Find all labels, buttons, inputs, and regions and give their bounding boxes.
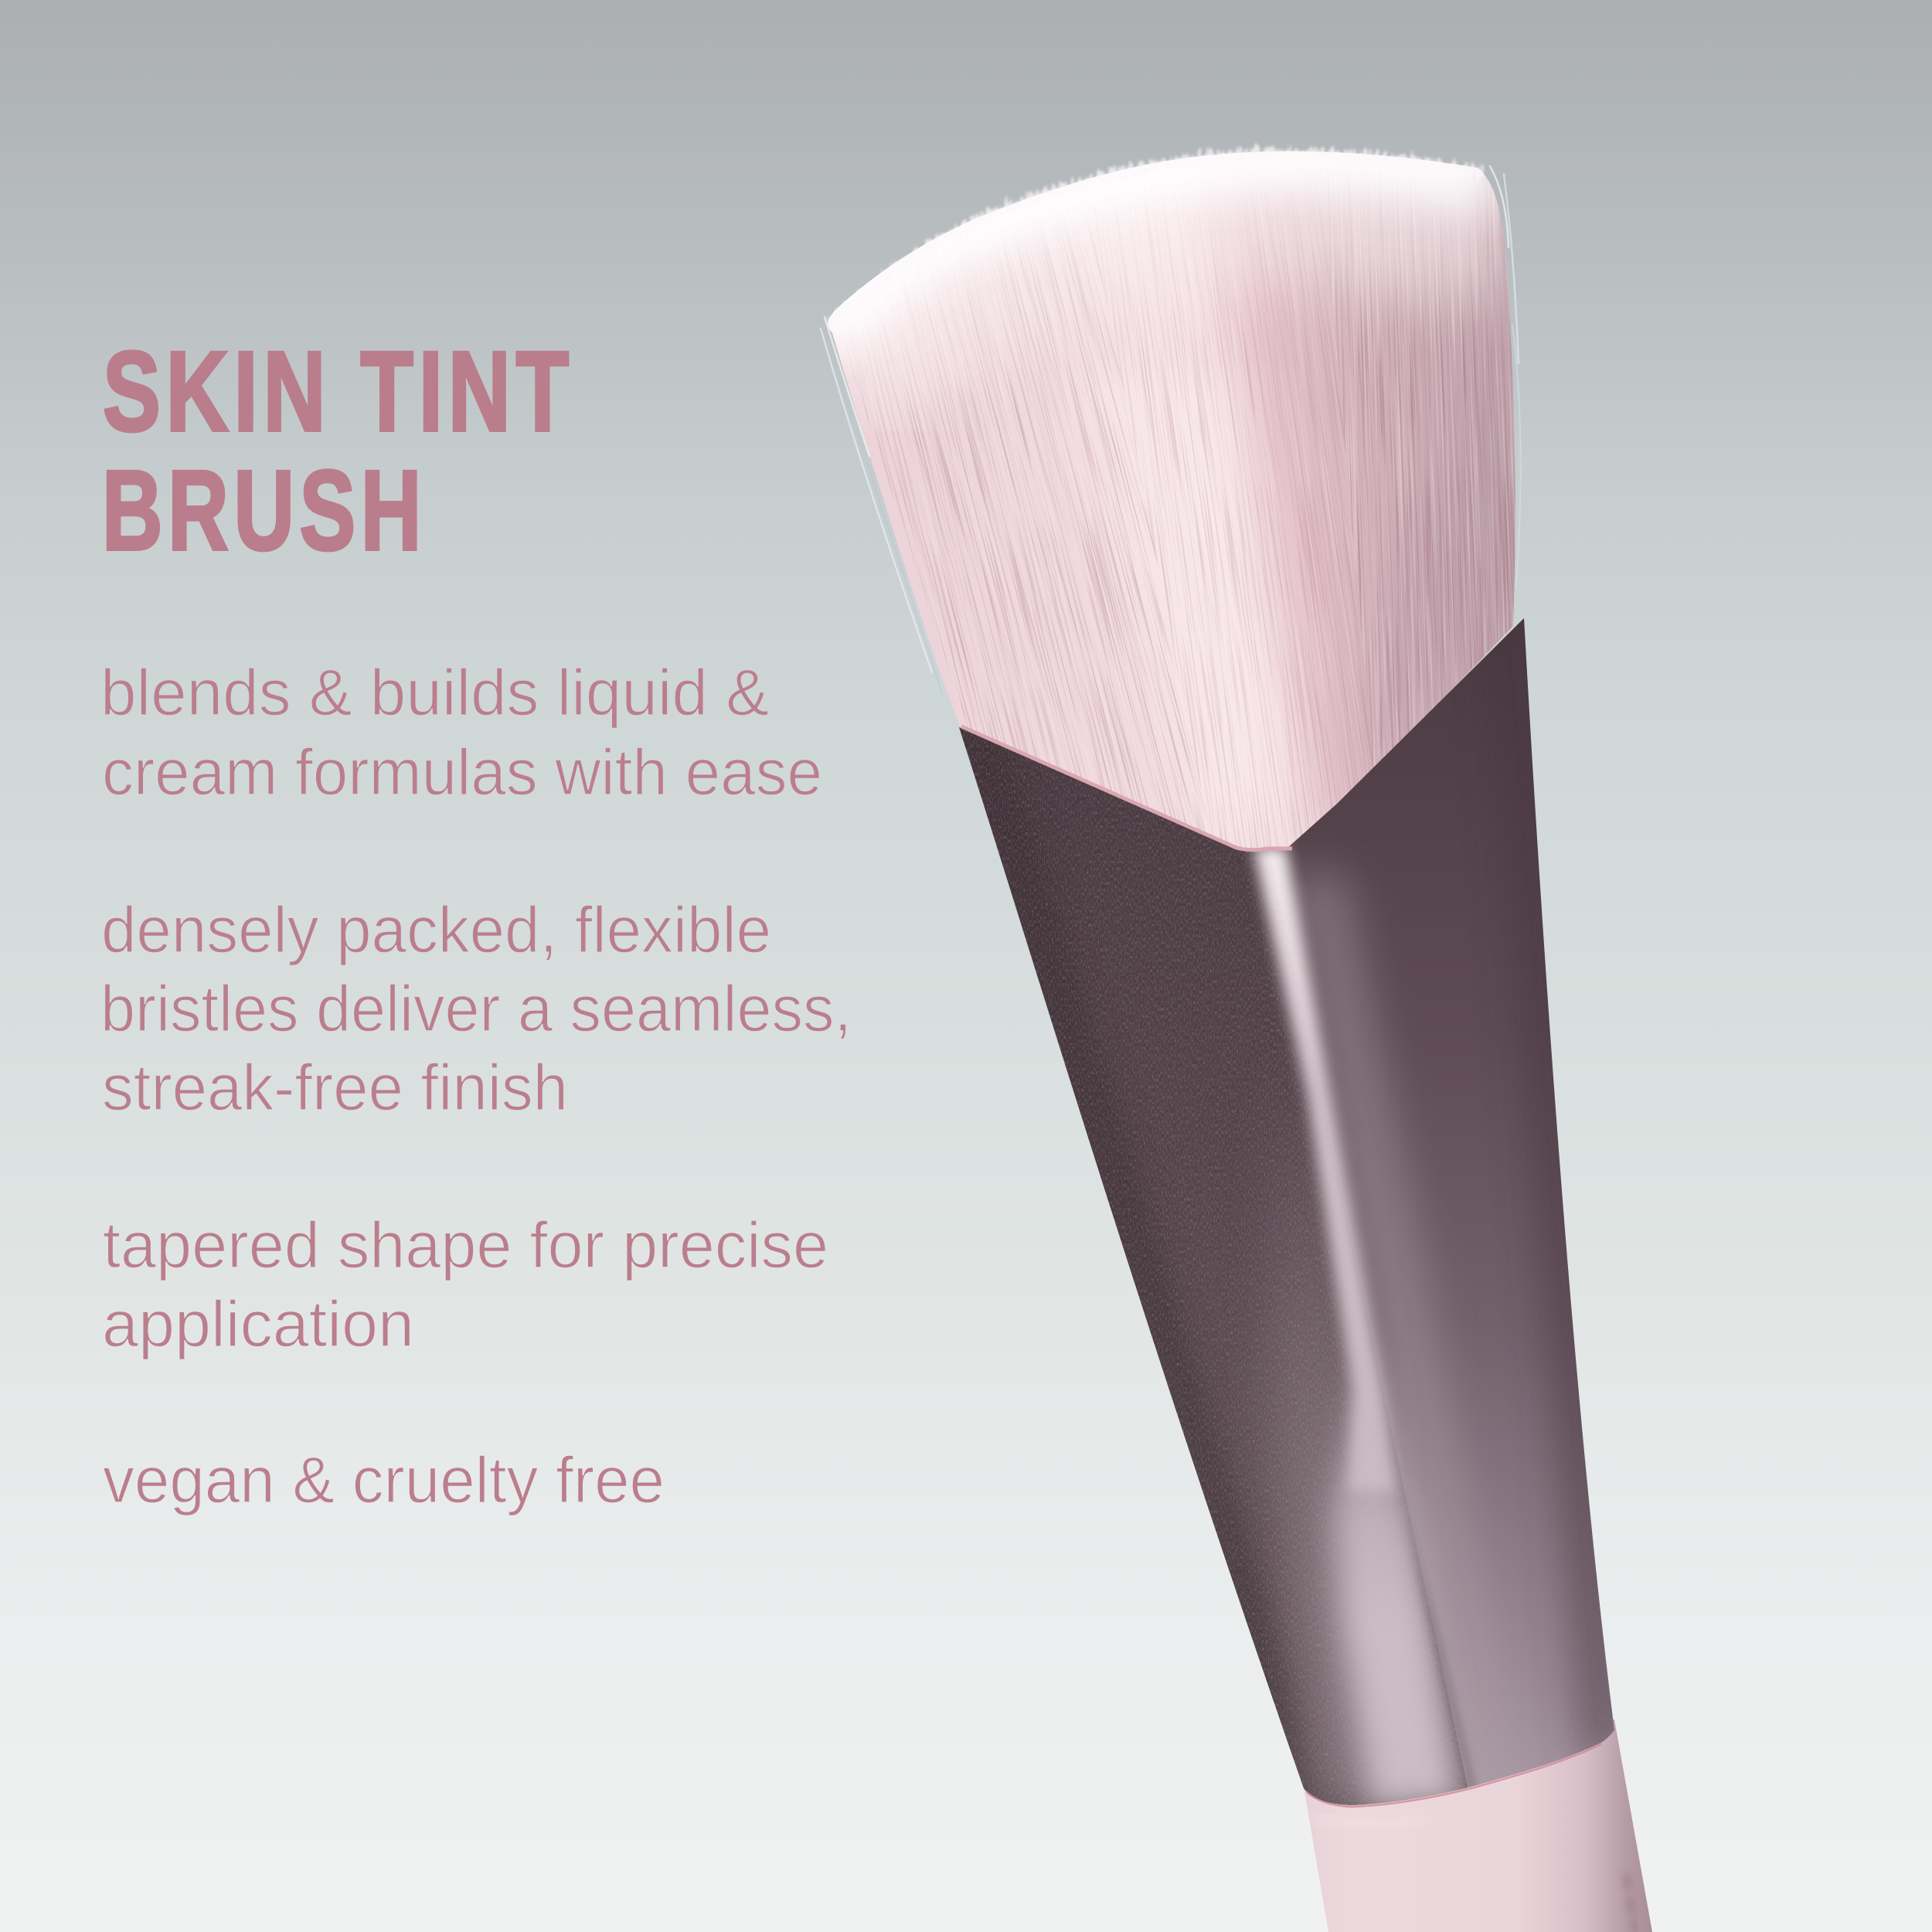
- bristle tip fuzz: [831, 155, 1484, 328]
- text block: densely packed bristles: streak-free finish: [102, 1051, 568, 1124]
- metal ferrule: [951, 611, 1631, 1816]
- text block: densely packed bristles: densely packed, flexible: [101, 893, 771, 966]
- text block: densely packed bristles: [100, 893, 852, 1124]
- title: Skin Tint Brush: SKIN TINT: [103, 328, 574, 455]
- seam between ferrule and handle: [1306, 1744, 1601, 1807]
- title: Skin Tint Brush: [102, 328, 574, 574]
- text block: blends and builds: [100, 656, 822, 808]
- ferrule left face: [951, 719, 1472, 1808]
- left shoulder sheen: [1260, 1155, 1377, 1805]
- centre highlight band, upper: [1253, 847, 1395, 1492]
- text block: densely packed bristles: bristles deliver a seamless,: [100, 972, 852, 1045]
- centre highlight band, lower: [1333, 1352, 1462, 1808]
- text block: tapered shape: application: [102, 1287, 414, 1360]
- ferrule right face: [1267, 611, 1631, 1816]
- soft dark line right of band: [1405, 1495, 1479, 1788]
- right edge shading: [1501, 618, 1614, 1758]
- text block: vegan and cruelty free: vegan & cruelty free: [103, 1444, 665, 1516]
- text block: tapered shape: tapered shape for precise: [103, 1209, 828, 1281]
- text block: tapered shape: [102, 1209, 828, 1360]
- brush bristles: [819, 142, 1521, 849]
- title: Skin Tint Brush: BRUSH: [102, 447, 427, 574]
- text block: blends and builds: cream formulas with ease: [102, 736, 822, 808]
- makeup brush illustration: [819, 142, 1652, 1932]
- left edge shading: [951, 719, 1329, 1808]
- brush handle: [1304, 1719, 1652, 1932]
- right shoulder sheen: [1294, 859, 1493, 1789]
- pink lip along the ferrule opening: [961, 726, 1292, 850]
- stray bristle hairs: [821, 166, 1520, 696]
- text block: blends and builds: blends & builds liquid &: [100, 656, 769, 729]
- metal grain on left face: [951, 719, 1476, 1816]
